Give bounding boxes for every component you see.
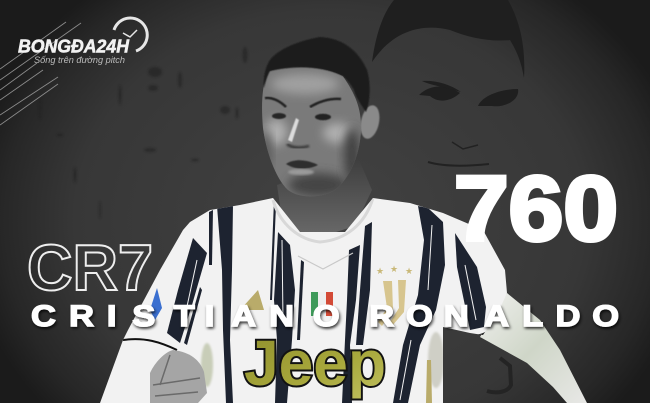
stripe highlights [183, 225, 476, 400]
nose [287, 144, 309, 148]
logo slogan: Sống trên đường pitch [34, 55, 125, 66]
logo wordmark: BONGĐA24H [18, 36, 130, 56]
hand [150, 350, 207, 403]
brows [265, 98, 341, 107]
sleeve patch [150, 288, 162, 320]
hair [264, 37, 370, 112]
ghost hair [372, 0, 524, 78]
italian shield [311, 292, 333, 316]
logo clock [114, 18, 147, 51]
eyes [272, 113, 286, 119]
logo stripes [0, 22, 81, 125]
gold trim [426, 360, 432, 403]
ghost portrait [372, 0, 524, 166]
logo [0, 18, 147, 125]
mouth [286, 160, 318, 169]
adidas mark [244, 290, 264, 310]
player [90, 37, 587, 403]
face [261, 66, 361, 197]
grunge texture [39, 47, 248, 219]
right forearm [480, 293, 587, 403]
club crest: ★ [405, 266, 413, 276]
shirt [90, 190, 520, 403]
club crest: ★ [376, 266, 384, 276]
ghost eyes [419, 81, 518, 106]
jeep sponsor: Jeep [244, 327, 386, 399]
club crest [376, 264, 413, 326]
ghost crest [487, 358, 511, 392]
cuff lines [123, 339, 177, 350]
shirt shading [428, 332, 444, 388]
face shading [271, 74, 339, 94]
player name: CRISTIANORONALDO [31, 299, 619, 332]
goal count: 760 [454, 158, 618, 260]
right ear [358, 104, 382, 140]
ghost nose and mouth [428, 142, 489, 166]
neck [277, 155, 372, 238]
jersey stripes [167, 200, 486, 403]
club crest: ★ [390, 264, 398, 274]
cr7 label: CR7 [27, 231, 153, 304]
